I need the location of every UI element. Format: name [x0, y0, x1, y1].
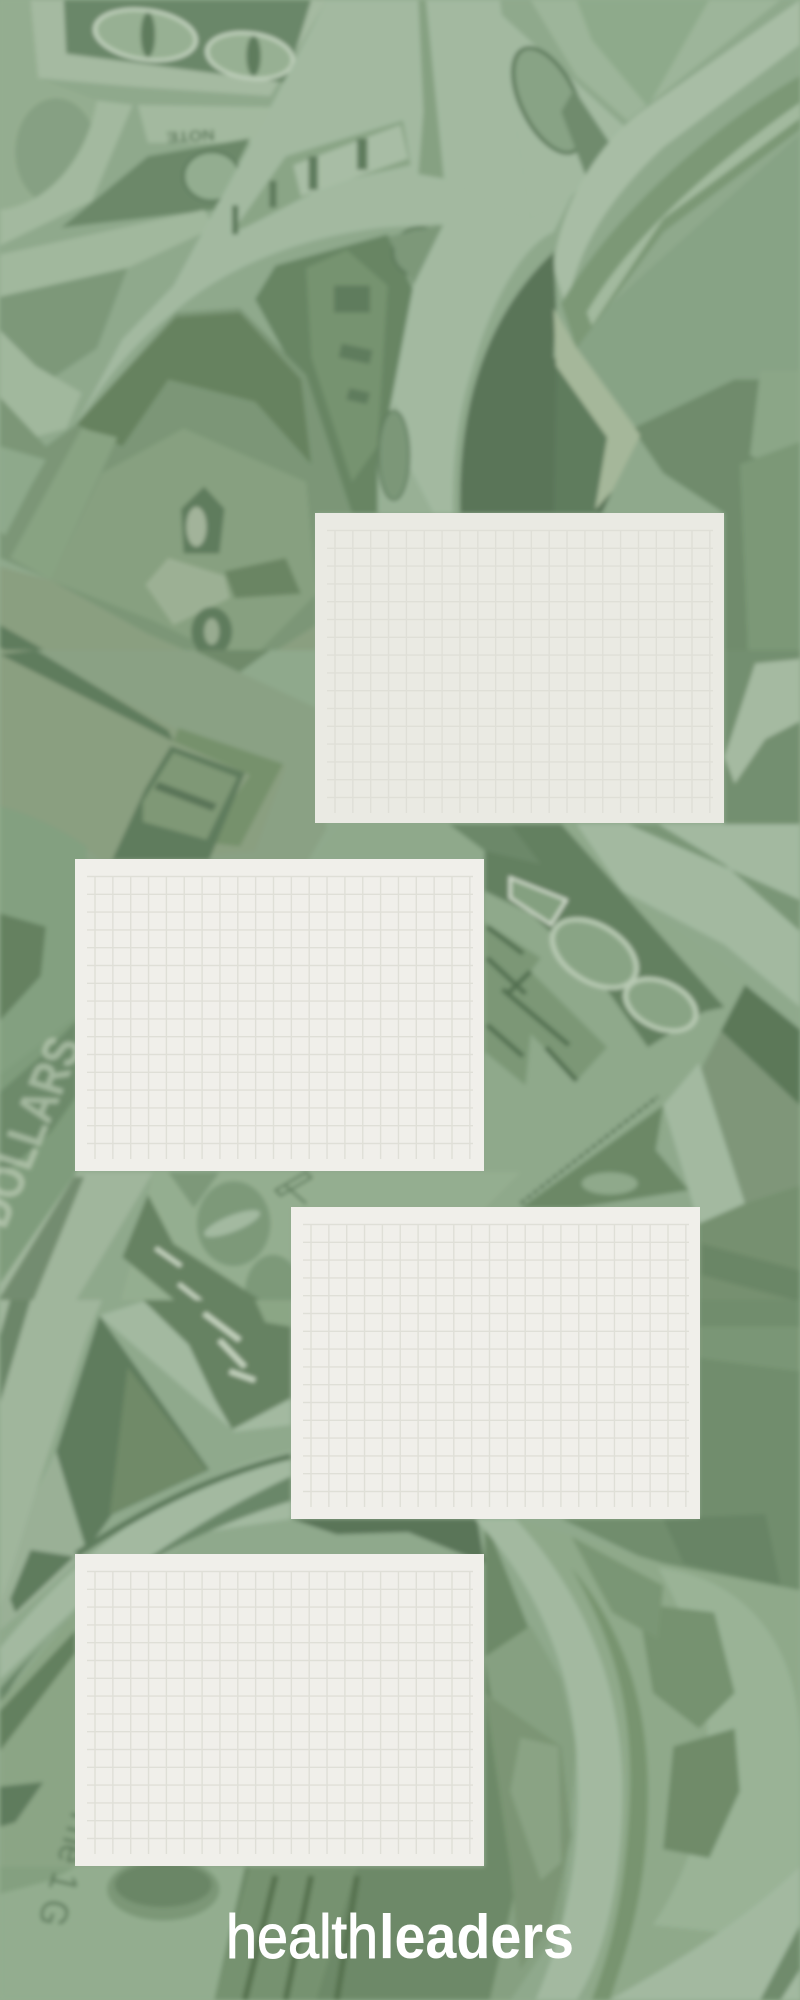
centre dark pocket [214, 1519, 577, 2000]
dark oval portrait [454, 250, 638, 513]
bill border and olive sheet [0, 650, 327, 864]
corner of bill [99, 1300, 291, 1432]
top bill [31, 0, 327, 96]
background: banknotes, upper section [0, 0, 800, 700]
logo: healthleaders [226, 1903, 574, 1972]
upper right paper [724, 650, 800, 860]
lower right strip [610, 1867, 800, 2000]
right sheet around portrait [383, 223, 554, 513]
fold dark right [622, 891, 745, 1021]
dark texture right [633, 379, 800, 700]
background: banknotes, lower section [0, 1300, 800, 2000]
ornament band [122, 1195, 291, 1350]
panel: blank grid card 3 [291, 1207, 700, 1519]
building engraving [638, 1604, 735, 1729]
central bill [316, 824, 747, 1208]
folds in centre [255, 234, 413, 513]
lower left bill [107, 1172, 520, 1350]
panel: blank grid card 2 [75, 859, 484, 1171]
sheet with oval [500, 13, 628, 219]
band ornament under panel [214, 1867, 357, 2000]
lettering block [485, 922, 607, 1085]
light sheet under panel [0, 567, 316, 700]
panel: blank grid card 4 [75, 1554, 484, 1866]
note label: NOTE [166, 126, 215, 145]
serial numerals: The 1 G [30, 1803, 108, 1931]
border of central bill [232, 121, 411, 232]
large lower right bill [571, 134, 800, 437]
left portrait patch [0, 806, 87, 1074]
top right dark [561, 1300, 800, 1595]
top left band [0, 1300, 102, 1608]
lower left sheet [0, 1867, 255, 2000]
big curved light band [474, 1519, 622, 2000]
portrait at top left [0, 0, 122, 210]
curved bill edge [0, 100, 133, 246]
note with serial panel [138, 105, 270, 143]
dark triangle fold [56, 1316, 209, 1550]
right engraved bill [515, 1519, 800, 2000]
logo: healthleaders: leaders [379, 1903, 574, 1972]
lower right note [699, 1186, 800, 1350]
logo: healthleaders: health [226, 1903, 378, 1972]
corner numeral frame [112, 746, 245, 860]
big curled central bill [77, 0, 526, 424]
left curled sheet [0, 1452, 87, 1630]
hair and face of portrait [0, 308, 352, 674]
left of lower panel [0, 1612, 76, 1885]
background: banknotes, middle section [0, 650, 800, 1350]
top right face and bands [531, 0, 781, 121]
eye and nose shading [181, 487, 224, 554]
arcing note band [0, 1452, 291, 1679]
lower left dollars band [0, 1016, 77, 1284]
panel: blank grid card 1 [315, 513, 724, 823]
small paper [663, 1063, 745, 1226]
